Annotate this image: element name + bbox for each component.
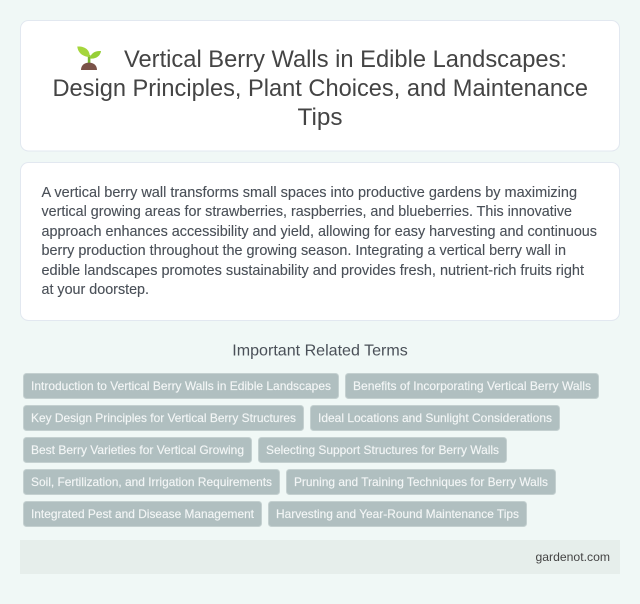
tag: support structures: Selecting Support Structures for Berry Walls: [266, 443, 499, 457]
paragraph line 1: A vertical berry wall transforms small spaces into productive gardens by maximizing: [42, 185, 577, 201]
heading: important related terms: Important Related Terms: [232, 342, 408, 360]
tag: design principles: [24, 406, 304, 430]
tag: support structures: [258, 438, 506, 462]
icon: seedling: [77, 46, 101, 70]
panel: title card: [20, 20, 620, 151]
paragraph line 3: approach enhances accessibility and yield, allowing for easy harvesting and continuous: [42, 224, 597, 240]
tag: varieties: Best Berry Varieties for Vertical Growing: [31, 443, 244, 457]
tag: pruning: Pruning and Training Techniques for Berry Walls: [294, 475, 548, 489]
tag: introduction: Introduction to Vertical Berry Walls in Edible Landscapes: [31, 379, 331, 393]
paragraph line 6: at your doorstep.: [42, 282, 149, 298]
title line 2: Design Principles, Plant Choices, and Maintenance: [52, 75, 588, 102]
tag: introduction: [24, 374, 338, 398]
tag: pruning: [286, 470, 556, 494]
tag: locations: Ideal Locations and Sunlight Considerations: [318, 411, 552, 425]
tag: pest management: [24, 502, 262, 526]
title line 1: Vertical Berry Walls in Edible Landscapes:: [124, 46, 567, 73]
tag: harvesting: Harvesting and Year-Round Maintenance Tips: [276, 507, 519, 521]
panel: related term tags: [24, 374, 598, 526]
tag: harvesting: [268, 502, 526, 526]
tag: benefits: Benefits of Incorporating Vertical Berry Walls: [353, 379, 591, 393]
tag: pest management: Integrated Pest and Disease Management: [31, 507, 255, 521]
paragraph line 4: berry production throughout the growing season. Integrating a vertical berry wall in: [42, 243, 566, 259]
footer source text: gardenot.com: [536, 550, 610, 564]
tag: soil: [24, 470, 280, 494]
tag: varieties: [24, 438, 252, 462]
tag: soil: Soil, Fertilization, and Irrigation Requirements: [31, 475, 272, 489]
tag: design principles: Key Design Principles for Vertical Berry Structures: [31, 411, 296, 425]
paragraph line 5: edible landscapes promotes sustainability and provides fresh, nutrient-rich fruits right: [42, 263, 584, 279]
footer bar: [20, 540, 620, 574]
paragraph line 2: vertical growing areas for strawberries, raspberries, and blueberries. This innovative: [42, 204, 572, 220]
tag: locations: [310, 406, 560, 430]
title line 3: Tips: [298, 104, 342, 131]
tag: benefits: [346, 374, 598, 398]
panel: intro paragraph: [20, 162, 620, 320]
